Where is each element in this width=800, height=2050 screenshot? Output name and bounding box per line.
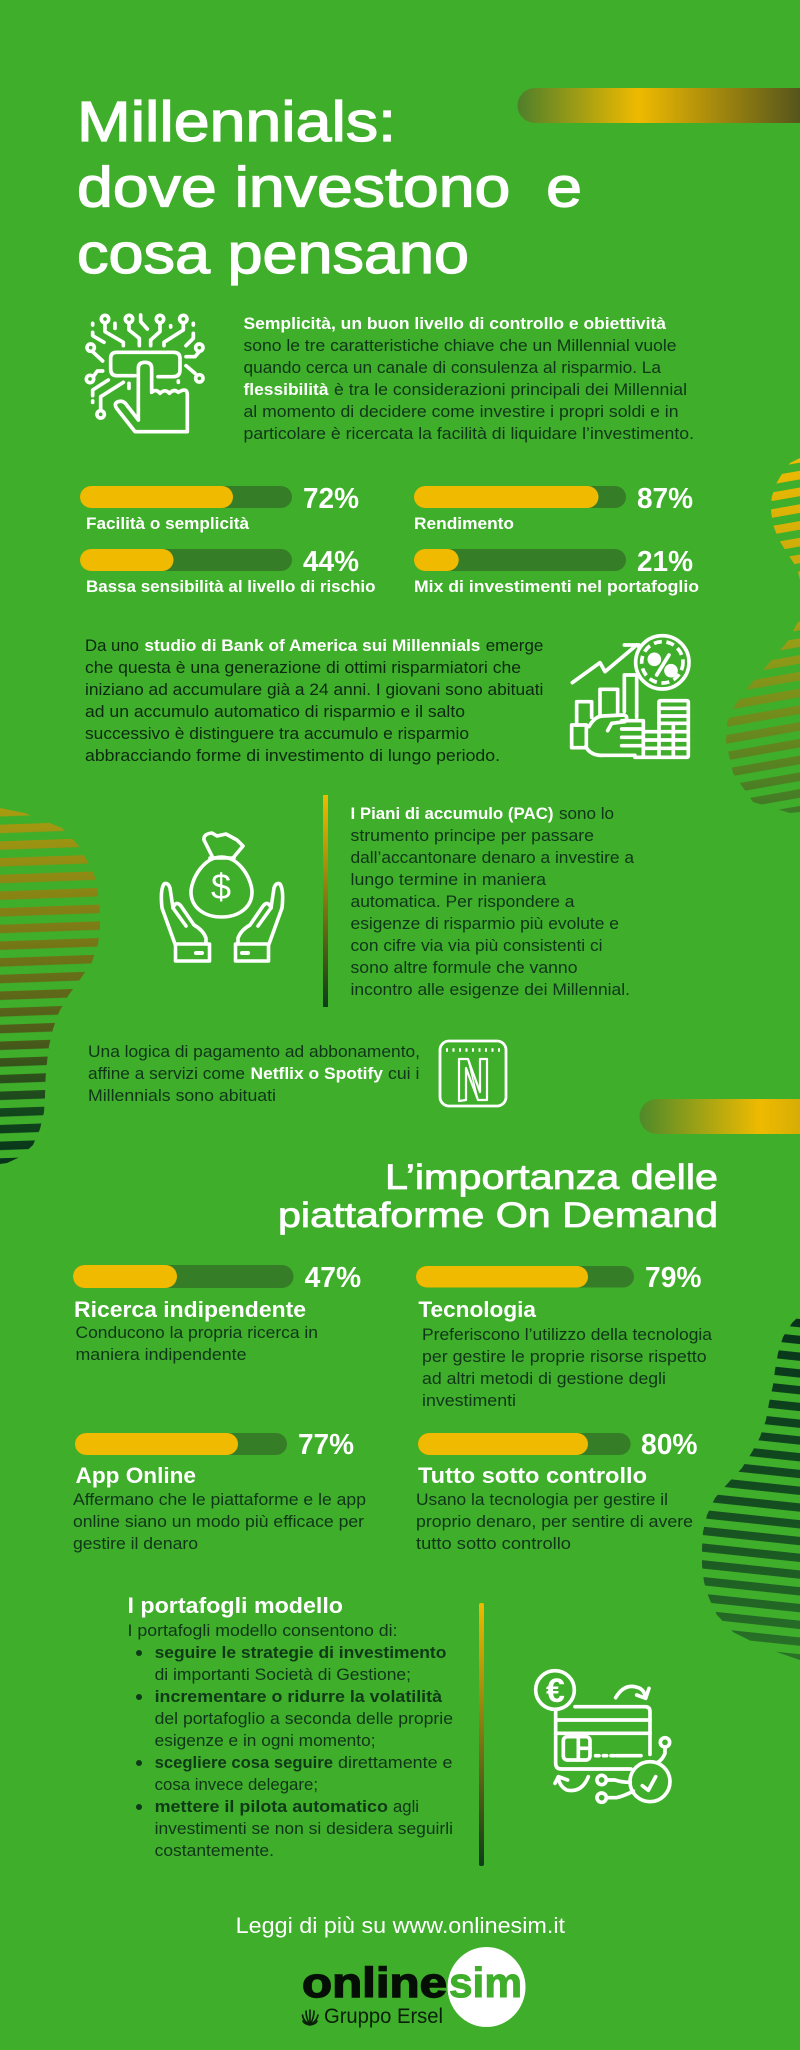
text block: model portfolios: I portafogli modello consentono di:	[128, 1621, 398, 1640]
text block: subscription logic	[88, 1042, 420, 1105]
logo: onlinesim Gruppo Ersel: Gruppo Ersel	[324, 2005, 443, 2028]
text block: intro: è tra le considerazioni principali dei Millennial	[334, 380, 687, 399]
text block: model portfolios: seguire le strategie di investimento	[155, 1643, 446, 1662]
stat card: Tecnologia 79%: Tecnologia	[418, 1297, 537, 1322]
stat card: App Online 77%: Affermano che le piattaforme e le app	[73, 1490, 366, 1509]
stat card: Ricerca indipendente 47%: maniera indipendente	[76, 1345, 246, 1364]
title	[77, 90, 582, 286]
stat card: Tutto sotto controllo 80%	[416, 1429, 698, 1553]
title: cosa pensano	[77, 222, 469, 286]
text block: subscription logic: Millennials sono abituati	[88, 1086, 276, 1105]
stat card: Tutto sotto controllo 80%: 80%	[641, 1429, 698, 1461]
text block: model portfolios: agli	[393, 1797, 419, 1816]
text block: intro: Semplicità, un buon livello di controllo e obiettività	[244, 314, 667, 333]
stat: Rendimento 87%: 87%	[637, 483, 693, 515]
stat card: Tutto sotto controllo 80%: tutto sotto controllo	[416, 1534, 571, 1553]
text block: model portfolios: del portafoglio a seconda delle proprie	[155, 1709, 453, 1728]
divider: vertical gradient PAC	[323, 795, 328, 1007]
stat: Facilità o semplicità 72%	[80, 483, 359, 533]
stat: Mix di investimenti 21%	[414, 546, 699, 596]
title: Millennials:	[77, 90, 396, 154]
icon: chart with percent chip and coins	[572, 636, 689, 757]
stat card: App Online 77%: online siano un modo più efficace per	[73, 1512, 364, 1531]
text block: intro: quando cerca un canale di consulenza al risparmio. La	[244, 358, 662, 377]
text block: Bank of America study: abbracciando forme di investimento di lungo periodo.	[85, 746, 500, 765]
text block: PAC: sono lo	[559, 804, 614, 823]
icon: Netflix calendar	[440, 1041, 506, 1106]
stat card: Ricerca indipendente 47%	[73, 1262, 361, 1364]
text block: PAC: sono altre formule che vanno	[350, 958, 578, 977]
text block: model portfolios: costantemente.	[155, 1841, 274, 1860]
stat card: Tecnologia 79%: Preferiscono l’utilizzo della tecnologia	[422, 1325, 713, 1344]
stat card: Tutto sotto controllo 80%: proprio denaro, per sentire di avere	[416, 1512, 693, 1531]
text block: intro: flessibilità	[244, 380, 329, 399]
call to action: Leggi di più su www.onlinesim.it	[236, 1913, 565, 1938]
text block: Bank of America study: che questa è una generazione di ottimi risparmiatori che	[85, 658, 521, 677]
text block: PAC: lungo termine in maniera	[350, 870, 547, 889]
text block: PAC: esigenze di risparmio più evolute e	[350, 914, 619, 933]
logo: onlinesim Gruppo Ersel: online	[302, 1959, 447, 2006]
icon detail: euro sign: €	[546, 1672, 565, 1710]
stat card: Ricerca indipendente 47%: Conducono la propria ricerca in	[76, 1323, 318, 1342]
gradient pill top	[518, 88, 800, 123]
stat card: App Online 77%: 77%	[298, 1429, 354, 1461]
decorative blob: right lower	[702, 1315, 800, 1660]
heading: on demand platforms: piattaforme On Demand	[278, 1196, 718, 1235]
text block: PAC	[350, 804, 635, 999]
text block: model portfolios: I portafogli modello	[128, 1593, 343, 1618]
text block: model portfolios: mettere il pilota automatico	[155, 1797, 388, 1816]
stat: Bassa sensibilità 44%: Bassa sensibilità al livello di rischio	[86, 577, 376, 596]
text block: model portfolios: direttamente e	[338, 1753, 452, 1772]
text block: subscription logic: affine a servizi come	[88, 1064, 245, 1083]
stat: Bassa sensibilità 44%	[80, 546, 376, 596]
text block: model portfolios	[128, 1593, 453, 1860]
stat: Mix di investimenti 21%: 21%	[637, 546, 693, 578]
stat card: Tecnologia 79%: per gestire le proprie risorse rispetto	[422, 1347, 707, 1366]
text block: PAC: dall’accantonare denaro a investire a	[350, 848, 635, 867]
stat card: Tecnologia 79%: 79%	[645, 1262, 702, 1294]
icon: touch circuit	[86, 315, 203, 432]
stat card: App Online 77%	[73, 1429, 366, 1553]
decorative blob: left	[0, 808, 100, 1164]
stat: Facilità o semplicità 72%: 72%	[303, 483, 359, 515]
text block: Bank of America study: iniziano ad accumulare già a 24 anni. I giovani sono abituati	[85, 680, 543, 699]
text block: subscription logic: Una logica di pagamento ad abbonamento,	[88, 1042, 420, 1061]
text block: Bank of America study	[85, 636, 543, 765]
stat card: Ricerca indipendente 47%: Ricerca indipendente	[74, 1297, 306, 1322]
divider: vertical gradient portfolios	[479, 1603, 484, 1866]
text block: subscription logic: cui i	[388, 1064, 419, 1083]
stat card: Tutto sotto controllo 80%: Usano la tecnologia per gestire il	[416, 1490, 668, 1509]
stat: Mix di investimenti 21%: Mix di investimenti nel portafoglio	[414, 577, 699, 596]
text block: model portfolios: incrementare o ridurre la volatilità	[155, 1687, 443, 1706]
stat card: App Online 77%: App Online	[76, 1463, 196, 1488]
text block: Bank of America study: successivo è distinguere tra accumulo e risparmio	[85, 724, 469, 743]
text block: PAC: automatica. Per rispondere a	[350, 892, 575, 911]
icon: money bag in hands	[161, 833, 283, 961]
heading: on demand platforms	[278, 1158, 718, 1235]
decorative blob: right upper	[726, 458, 800, 813]
text block: subscription logic: Netflix o Spotify	[250, 1064, 384, 1083]
icon detail: hand right	[236, 884, 283, 961]
text block: Bank of America study: Da uno	[85, 636, 139, 655]
text block: model portfolios: scegliere cosa seguire	[155, 1753, 333, 1772]
text block: model portfolios: investimenti se non si desidera seguirli	[155, 1819, 453, 1838]
text block: model portfolios: esigenze e in ogni momento;	[155, 1731, 376, 1750]
text block: intro: al momento di decidere come investire i propri soldi e in	[244, 402, 678, 421]
stat card: Tecnologia 79%: ad altri metodi di gestione degli	[422, 1369, 666, 1388]
stat: Rendimento 87%: Rendimento	[414, 514, 514, 533]
stat card: Tecnologia 79%: investimenti	[422, 1391, 516, 1410]
logo: onlinesim Gruppo Ersel: sim	[449, 1959, 522, 2006]
stat: Bassa sensibilità 44%: 44%	[303, 546, 359, 578]
text block: Bank of America study: studio di Bank of America sui Millennials	[144, 636, 480, 655]
text block: PAC: incontro alle esigenze dei Millennial.	[350, 980, 630, 999]
gradient pill middle	[640, 1099, 800, 1134]
text block: Bank of America study: emerge	[486, 636, 543, 655]
text block: PAC: con cifre via via più consistenti ci	[350, 936, 602, 955]
title: dove investono e	[77, 156, 582, 220]
text block: model portfolios: di importanti Società di Gestione;	[155, 1665, 411, 1684]
text block: intro: sono le tre caratteristiche chiave che un Millennial vuole	[244, 336, 676, 355]
heading: on demand platforms: L’importanza delle	[385, 1158, 718, 1197]
text block: PAC: I Piani di accumulo (PAC)	[350, 804, 554, 823]
icon: Ersel leaf	[302, 2010, 318, 2025]
stat card: Ricerca indipendente 47%: 47%	[305, 1262, 361, 1294]
text block: model portfolios: cosa invece delegare;	[155, 1775, 318, 1794]
stat card: App Online 77%: gestire il denaro	[73, 1534, 198, 1553]
text block: intro: particolare è ricercata la facilità di liquidare l’investimento.	[244, 424, 694, 443]
icon detail: dollar sign: $	[211, 866, 231, 907]
stat card: Tutto sotto controllo 80%: Tutto sotto controllo	[418, 1463, 647, 1488]
text block: Bank of America study: ad un accumulo automatico di risparmio e il salto	[85, 702, 465, 721]
text block: PAC: strumento principe per passare	[350, 826, 594, 845]
stat: Facilità o semplicità 72%: Facilità o semplicità	[86, 514, 250, 533]
icon detail: hand left	[161, 884, 210, 961]
stat card: Tecnologia 79%	[416, 1262, 713, 1410]
stat: Rendimento 87%	[414, 483, 693, 533]
logo: onlinesim Gruppo Ersel	[302, 1947, 526, 2028]
icon: credit card with euro and check	[536, 1671, 670, 1802]
text block: intro	[244, 314, 694, 443]
